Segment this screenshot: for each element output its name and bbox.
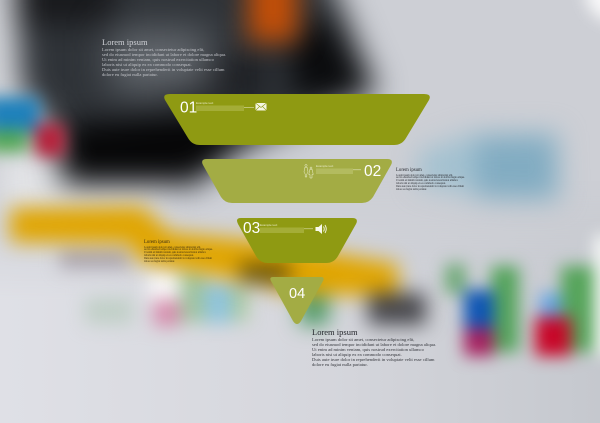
number 04: 04 xyxy=(289,286,305,302)
text block 02: Lorem ipsum xyxy=(396,168,422,173)
orange smear xyxy=(248,0,298,42)
number 02: 02 xyxy=(364,163,381,180)
text block 03: sed do eiusmod tempor incididunt ut labore et dolore magna aliqua. xyxy=(144,248,213,251)
text block bottom: sed do eiusmod tempor incididunt ut labore et dolore magna aliqua. xyxy=(312,342,436,347)
left small bars xyxy=(0,97,65,156)
caption 03: Example text xyxy=(260,223,278,227)
right bars xyxy=(445,0,600,356)
text block 03: Lorem ipsum dolor sit amet, consectetur adipiscing elit, xyxy=(144,246,201,248)
panel 04 xyxy=(270,277,324,324)
text block top: Duis aute irure dolor in reprehenderit in voluptate velit esse cillum xyxy=(102,67,224,72)
caption 02: Example text xyxy=(316,164,334,168)
text block top: Ut enim ad minim veniam, quis nostrud exercitation ullamco xyxy=(102,57,214,62)
text block top: dolore eu fugiat nulla pariatur. xyxy=(102,72,158,77)
icon: people xyxy=(304,164,313,178)
text block bottom: Lorem ipsum xyxy=(312,327,358,337)
text block 02: Lorem ipsum dolor sit amet, consectetur adipiscing elit, xyxy=(396,174,453,176)
blue blob xyxy=(418,132,560,200)
text block 02: Ut enim ad minim veniam, quis nostrud exercitation ullamco xyxy=(396,179,458,182)
faint lower chart marks xyxy=(60,248,248,326)
text block bottom: Duis aute irure dolor in reprehenderit in voluptate velit esse cillum xyxy=(312,357,434,362)
text block 02: Duis aute irure dolor in reprehenderit in voluptate velit esse cillum xyxy=(396,185,464,188)
text block bottom: Lorem ipsum dolor sit amet, consectetur adipiscing elit, xyxy=(312,337,414,342)
number 03: 03 xyxy=(243,220,260,237)
text block top: Lorem ipsum xyxy=(102,37,148,47)
text block top: Lorem ipsum dolor sit amet, consectetur adipiscing elit, xyxy=(102,47,204,52)
text block 02 xyxy=(396,168,465,191)
caption 02 xyxy=(316,164,361,174)
text block bottom: dolore eu fugiat nulla pariatur. xyxy=(312,362,368,367)
text block top: sed do eiusmod tempor incididunt ut labore et dolore magna aliqua. xyxy=(102,52,226,57)
text block top: laboris nisi ut aliquip ex ea commodo consequat. xyxy=(102,62,192,67)
text block 03: Duis aute irure dolor in reprehenderit in voluptate velit esse cillum xyxy=(144,257,212,260)
number 01: 01 xyxy=(180,100,197,116)
panel 03 xyxy=(237,218,357,263)
caption 01: Example text xyxy=(196,101,214,105)
text block 02: sed do eiusmod tempor incididunt ut labore et dolore magna aliqua. xyxy=(396,176,465,179)
panel 01 xyxy=(164,94,430,145)
text block 03: Lorem ipsum xyxy=(144,240,170,245)
panel 02 xyxy=(202,159,392,203)
icon: speaker xyxy=(316,224,326,234)
caption 01 xyxy=(196,101,254,111)
text block 02: laboris nisi ut aliquip ex ea commodo consequat. xyxy=(396,182,446,185)
yellow band xyxy=(10,206,426,325)
dark blob xyxy=(14,0,378,186)
icon: envelope xyxy=(256,103,266,110)
text block top xyxy=(102,37,226,77)
text block 02: dolore eu fugiat nulla pariatur. xyxy=(396,188,427,191)
text block 03: Ut enim ad minim veniam, quis nostrud exercitation ullamco xyxy=(144,251,206,254)
text block bottom xyxy=(312,327,436,367)
text block 03: dolore eu fugiat nulla pariatur. xyxy=(144,260,175,263)
text block bottom: Ut enim ad minim veniam, quis nostrud exercitation ullamco xyxy=(312,347,424,352)
text block 03: laboris nisi ut aliquip ex ea commodo consequat. xyxy=(144,254,194,257)
text block 03 xyxy=(144,240,213,263)
text block bottom: laboris nisi ut aliquip ex ea commodo consequat. xyxy=(312,352,402,357)
